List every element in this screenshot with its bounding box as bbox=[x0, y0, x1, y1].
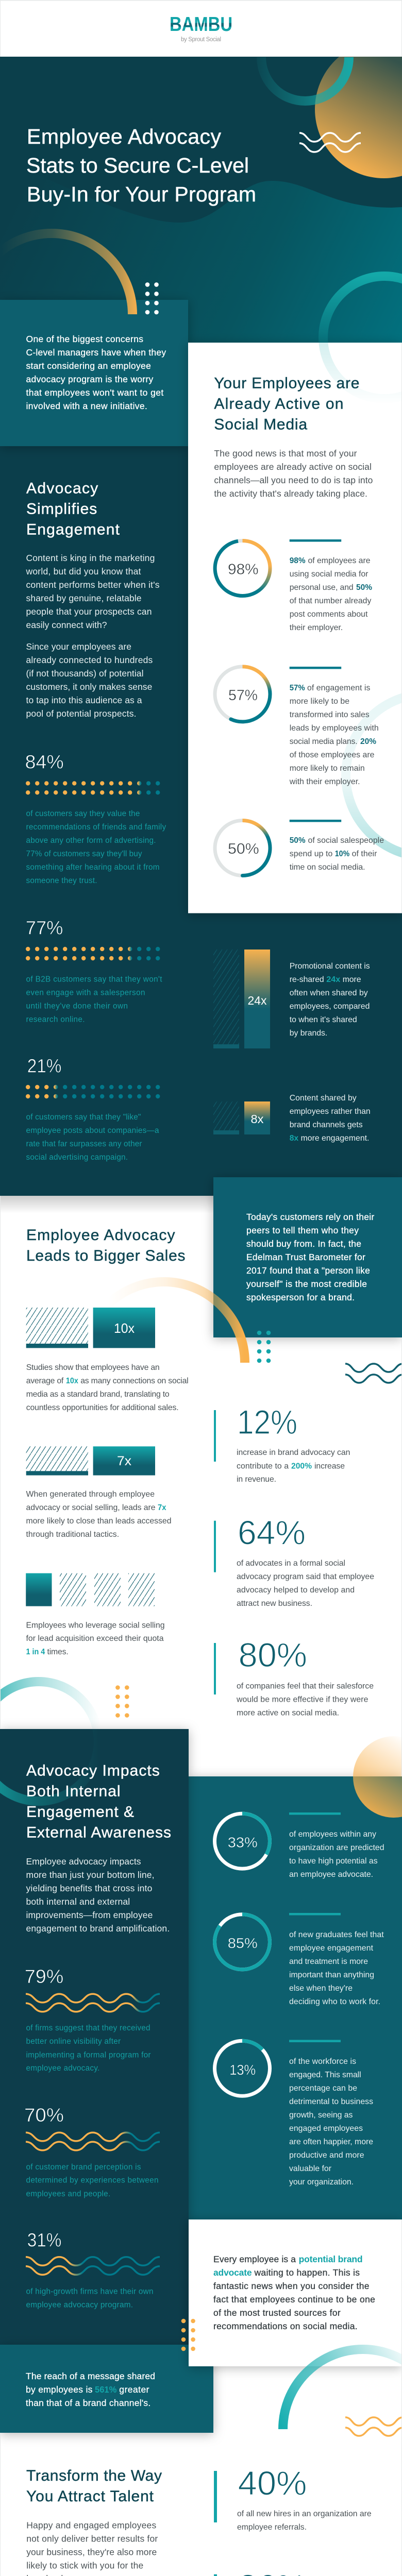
text: happy employees: not only deliver better results for bbox=[26, 2533, 158, 2544]
stat text: 57%: more likely to remain bbox=[290, 764, 365, 773]
caption 70%: of customer brand perception is bbox=[26, 2163, 141, 2172]
caption 79%: of firms suggest that they received bbox=[26, 2024, 150, 2032]
stat text: 13%: of the workforce is bbox=[289, 2057, 356, 2066]
stat text: 13%: productive and more bbox=[289, 2151, 364, 2160]
heading: advocacy simplifies engagement: Simplifies bbox=[26, 500, 97, 517]
icon: white waves bbox=[299, 133, 361, 152]
icon: gold dots bbox=[181, 2319, 195, 2351]
caption 77%: research online. bbox=[26, 1015, 85, 1024]
text 40% bbox=[237, 2510, 372, 2532]
caption 79%: employee advocacy. bbox=[26, 2064, 99, 2073]
chart: donut 57%: 57% bbox=[228, 687, 258, 704]
text: content shared by employees: more engagement. bbox=[301, 1134, 369, 1143]
text: impacts: yielding benefits that cross into bbox=[26, 1883, 152, 1893]
title: Buy-In for Your Program bbox=[27, 182, 256, 206]
text: every employee: advocate bbox=[213, 2267, 252, 2278]
heading: bigger sales: Leads to Bigger Sales bbox=[26, 1247, 186, 1264]
text: promotional content: 24x bbox=[326, 975, 340, 984]
text: promotional content: to when it's shared bbox=[290, 1015, 357, 1024]
stat text: 50%: of their bbox=[352, 850, 377, 858]
text: reach: greater bbox=[119, 2384, 149, 2395]
stat text: 13%: detrimental to business bbox=[289, 2097, 373, 2106]
chart: donut 33%: 33% bbox=[228, 1834, 258, 1850]
text 12%: increase bbox=[314, 1462, 345, 1470]
text: 1 in 4: for lead acquisition exceed their quota bbox=[26, 1634, 164, 1643]
stat: 21%: 21% bbox=[27, 1055, 61, 1076]
stat text: 13%: engaged employees bbox=[289, 2124, 363, 2133]
text: customers rely on peers bbox=[246, 1212, 374, 1302]
text: content shared by employees bbox=[290, 1094, 371, 1143]
text 40%: employee referrals. bbox=[237, 2523, 307, 2532]
text: 10x connections: average of bbox=[26, 1377, 64, 1385]
text: content is king: (if not thousands) of potential bbox=[26, 668, 143, 679]
text: 7x leads: 7x bbox=[158, 1503, 166, 1512]
stat text: 13%: are often happier, more bbox=[289, 2138, 373, 2146]
stat text: 85%: of new graduates feel that bbox=[289, 1930, 384, 1939]
caption 84%: above any other form of advertising. bbox=[26, 836, 156, 845]
text: good news: employees are already active on social bbox=[214, 462, 372, 472]
heading: Already Active on bbox=[214, 396, 343, 412]
bar chart: 24x bbox=[213, 950, 270, 1048]
stat text: 57%: 20% bbox=[360, 737, 376, 746]
stat text: 85%: important than anything bbox=[289, 1971, 374, 1979]
stat: 86% bbox=[214, 2568, 360, 2576]
stat text: 98%: their employer. bbox=[290, 623, 343, 632]
text: promotional content: employees, compared bbox=[290, 1002, 370, 1011]
text: happy employees bbox=[26, 2520, 159, 2576]
caption 77%: until they've done their own bbox=[26, 1002, 128, 1011]
text: 1 in 4 bbox=[26, 1621, 165, 1656]
panel: employees active on social media bbox=[188, 276, 402, 913]
heading: advocacy simplifies engagement bbox=[26, 480, 120, 538]
bar chart: 8x bbox=[213, 1101, 270, 1134]
stat text: 57%: of those employees are bbox=[290, 751, 375, 759]
decorative gold arch bbox=[0, 233, 132, 314]
stat text: 50%: 50% bbox=[290, 836, 306, 845]
caption 21%: rate that far surpasses any other bbox=[26, 1140, 142, 1148]
text: every employee: fantastic news when you consider the bbox=[213, 2281, 369, 2291]
text: intro: involved with a new initiative. bbox=[26, 401, 147, 411]
panel: hero bbox=[0, 40, 402, 448]
stat: 80%: 80% bbox=[239, 1636, 307, 1674]
stat: 77% bbox=[26, 917, 162, 1024]
text: 7x leads bbox=[26, 1490, 171, 1539]
chart: donut 57% bbox=[215, 667, 270, 722]
text: content is king: people that your prospects can bbox=[26, 606, 152, 617]
text: every employee: recommendations on social media. bbox=[213, 2321, 358, 2331]
icon: gold dots bbox=[115, 1685, 129, 1718]
chart: donut 85% bbox=[214, 1914, 270, 1970]
text: happy employees: Happy and engaged employees bbox=[26, 2520, 156, 2531]
caption 84%: someone they trust. bbox=[26, 876, 97, 885]
text: content is king: shared by genuine, relatable bbox=[26, 593, 141, 603]
stat text: 50% bbox=[290, 820, 384, 872]
stat: 64% bbox=[214, 1514, 374, 1608]
text: reach: than that of a brand channel's. bbox=[26, 2398, 150, 2408]
caption 84%: of customers say they value the bbox=[26, 809, 140, 818]
text: intro: start considering an employee bbox=[26, 361, 151, 371]
text: content shared by employees: employees rather than bbox=[290, 1107, 371, 1116]
text: content is king: world, but did you know that bbox=[26, 566, 141, 577]
text: every employee: potential brand bbox=[299, 2254, 363, 2264]
text: every employee: Every employee is a bbox=[213, 2254, 296, 2264]
stat: 80% bbox=[214, 1636, 374, 1718]
text: 7x leads: advocacy or social selling, leads are bbox=[26, 1503, 156, 1512]
stat text: 50%: 10% bbox=[335, 850, 349, 858]
text: impacts: both internal and external bbox=[26, 1896, 130, 1907]
text 80%: more active on social media. bbox=[237, 1708, 339, 1718]
chart: donut 50%: 50% bbox=[228, 841, 259, 857]
panel: header bbox=[0, 0, 402, 57]
text 12%: increase in brand advocacy can bbox=[237, 1448, 350, 1457]
logo: Bambu: BAMBU bbox=[170, 13, 232, 36]
text: happy employees: likely to stick with you for the bbox=[26, 2560, 143, 2570]
stat text: 57%: social media plans. bbox=[290, 737, 358, 746]
icon: teal dots bbox=[257, 1331, 271, 1363]
caption 84%: 77% of customers say they'll buy bbox=[26, 850, 142, 858]
stat text: 33%: organization are predicted bbox=[289, 1843, 384, 1852]
text: every employee: fact that employees continue to be one bbox=[213, 2294, 375, 2304]
wave chart 79% bbox=[26, 1994, 160, 2012]
caption 79% bbox=[26, 2024, 150, 2073]
dot chart 77% bbox=[28, 947, 158, 960]
stat text: 50%: spend up to bbox=[290, 850, 333, 858]
wave chart 31% bbox=[26, 2257, 160, 2275]
stat text: 98%: 98% bbox=[290, 556, 306, 565]
decorative gold arch bbox=[83, 1282, 245, 1363]
caption 84% bbox=[26, 809, 166, 885]
text: intro: advocacy program is the worry bbox=[26, 374, 154, 384]
text: content shared by employees: 8x bbox=[290, 1134, 298, 1143]
heading: bigger sales bbox=[26, 1227, 186, 1264]
panel: potential brand advocate callout bbox=[189, 2219, 402, 2366]
dot chart 21% bbox=[28, 1085, 158, 1098]
stat text: 85% bbox=[289, 1913, 384, 2006]
stat text: 85%: else when they're bbox=[289, 1984, 353, 1993]
title bbox=[26, 125, 256, 206]
chart: donut 13%: 13% bbox=[229, 2062, 256, 2078]
text: 7x leads: through traditional tactics. bbox=[26, 1530, 119, 1539]
text: reach: by employees is bbox=[26, 2384, 93, 2395]
icon: white dots bbox=[145, 282, 159, 314]
text: reach: The reach of a message shared bbox=[26, 2371, 155, 2381]
text: customers rely on peers: 2017 found that a "person like bbox=[246, 1265, 370, 1276]
stat: 70% bbox=[24, 2105, 160, 2198]
panel: trust callout bbox=[213, 1177, 402, 1337]
text: 7x leads: more likely to close than leads accessed bbox=[26, 1517, 171, 1526]
text: 10x connections: 10x bbox=[66, 1377, 78, 1385]
title: Employee Advocacy bbox=[27, 125, 222, 148]
text: intro: C-level managers have when they bbox=[26, 347, 166, 358]
stat text: 98%: personal use, and bbox=[290, 583, 354, 592]
text: impacts: engagement to brand amplification. bbox=[26, 1923, 170, 1934]
stat: 77%: 77% bbox=[26, 917, 63, 939]
stat text: 13%: engaged. This small bbox=[289, 2071, 361, 2079]
title: Stats to Secure C-Level bbox=[26, 154, 249, 177]
stat text: 57%: 57% bbox=[290, 684, 305, 692]
heading: bigger sales: Employee Advocacy bbox=[26, 1227, 175, 1244]
caption 84%: recommendations of friends and family bbox=[26, 823, 166, 832]
text: promotional content: Promotional content is bbox=[290, 962, 370, 971]
text 80%: of companies feel that their salesforce bbox=[237, 1682, 374, 1691]
text: promotional content: often when shared by bbox=[290, 989, 368, 997]
stat text: 85%: employee engagement bbox=[289, 1944, 374, 1953]
panel: right teal engagement stats bbox=[189, 1736, 402, 2219]
text: content is king: customers, it only makes sense bbox=[26, 682, 152, 692]
heading: transform: You Attract Talent bbox=[26, 2488, 154, 2505]
text: content is king: to tap into this audience as a bbox=[26, 695, 142, 705]
caption 21% bbox=[26, 1113, 159, 1162]
caption 21%: of customers say that they "like" bbox=[26, 1113, 141, 1122]
text: content is king: already connected to hundreds bbox=[26, 655, 153, 665]
panel: dark internal and external awareness bbox=[0, 1682, 189, 2345]
text: 1 in 4: Employees who leverage social selling bbox=[26, 1621, 165, 1630]
stat text: 98%: 50% bbox=[356, 583, 372, 592]
heading: transform bbox=[26, 2467, 162, 2505]
text: 10x connections: as many connections on social bbox=[80, 1377, 189, 1385]
text: impacts: Employee advocacy impacts bbox=[26, 1856, 141, 1867]
stat text: 98%: post comments about bbox=[290, 610, 368, 619]
bar chart: 8x: 8x bbox=[250, 1112, 264, 1126]
chart: donut 85%: 85% bbox=[228, 1935, 258, 1951]
text: impacts: more than just your bottom line, bbox=[26, 1870, 155, 1880]
text 40%: of all new hires in an organization are bbox=[237, 2510, 372, 2518]
caption 31% bbox=[26, 2287, 154, 2310]
stat text: 13%: valuable for bbox=[289, 2164, 331, 2173]
stat text: 57%: with their employer. bbox=[289, 777, 360, 786]
stat: 64%: 64% bbox=[238, 1514, 306, 1552]
text: promotional content: re-shared bbox=[290, 975, 324, 984]
stat text: 33% bbox=[289, 1812, 384, 1879]
text: 1 in 4: 1 in 4 bbox=[26, 1648, 45, 1656]
text: reach: 561% bbox=[95, 2384, 117, 2395]
stat: 21% bbox=[26, 1055, 159, 1162]
text 64% bbox=[237, 1559, 374, 1608]
stat text: 50%: of social salespeople bbox=[308, 836, 384, 845]
text: content is king: Since your employees are bbox=[26, 641, 131, 652]
panel: talent section background bbox=[0, 2365, 402, 2576]
text 80%: would be more effective if they were bbox=[236, 1696, 368, 1704]
text 12%: in revenue. bbox=[237, 1475, 276, 1484]
dot chart 84% bbox=[28, 781, 158, 795]
stat text: 57%: leads by employees with bbox=[290, 724, 379, 733]
stat text: 57%: more likely to be bbox=[290, 697, 349, 706]
heading: advocacy impacts: Engagement & bbox=[26, 1803, 134, 1821]
stat text: 85%: and treatment is more bbox=[289, 1957, 368, 1966]
heading: advocacy impacts: External Awareness bbox=[26, 1824, 171, 1841]
stat text: 33%: to have high potential as bbox=[289, 1857, 378, 1866]
panel: bigger sales section background bbox=[0, 1196, 402, 1778]
text: 10x connections: Studies show that employees have an bbox=[26, 1363, 160, 1372]
text: customers rely on peers: should buy from. In fact, the bbox=[246, 1239, 361, 1249]
stat text: 13%: percentage can be bbox=[289, 2084, 357, 2093]
stat: 31%: 31% bbox=[27, 2230, 61, 2251]
chart: donut 98%: 98% bbox=[228, 561, 259, 578]
text: content is king: Content is king in the marketing bbox=[26, 553, 155, 563]
text: content is king: pool of potential prospects. bbox=[26, 708, 136, 719]
stat text: 50%: time on social media. bbox=[290, 863, 365, 872]
text 80% bbox=[236, 1682, 374, 1718]
text: 10x connections bbox=[26, 1363, 189, 1412]
section shadow bbox=[0, 1196, 402, 1213]
stat text: 85%: deciding who to work for. bbox=[289, 1997, 380, 2006]
heading: Social Media bbox=[214, 416, 307, 433]
text 64%: attract new business. bbox=[237, 1599, 312, 1608]
heading: advocacy simplifies engagement: Advocacy bbox=[26, 480, 98, 497]
text: 10x connections: countless opportunities for additional sales. bbox=[26, 1403, 179, 1412]
text: every employee: of the most trusted sources for bbox=[213, 2308, 341, 2318]
icon: teal waves bbox=[345, 1364, 402, 1383]
caption 77% bbox=[26, 975, 162, 1024]
text: intro: One of the biggest concerns bbox=[26, 334, 143, 344]
text: customers rely on peers: peers to tell them who they bbox=[246, 1225, 359, 1235]
text: intro: that employees won't want to get bbox=[26, 387, 163, 398]
text: every employee bbox=[213, 2254, 375, 2331]
heading bbox=[214, 375, 359, 433]
text: customers rely on peers: Edelman Trust Barometer for bbox=[246, 1252, 365, 1262]
stat: 31% bbox=[26, 2230, 160, 2310]
chart: 7x bars bbox=[26, 1446, 155, 1476]
stat text: 98%: using social media for bbox=[290, 570, 368, 579]
caption 21%: employee posts about companies—a bbox=[26, 1126, 159, 1135]
chart: donut 50% bbox=[215, 820, 270, 876]
chart: donut 13% bbox=[214, 2041, 270, 2096]
text: intro bbox=[26, 334, 166, 411]
text: by Sprout Social: by Sprout Social bbox=[181, 37, 221, 43]
text: promotional content: more bbox=[343, 975, 361, 984]
text: customers rely on peers: yourself" is the most credible bbox=[246, 1279, 367, 1289]
text: good news: The good news is that most of your bbox=[214, 448, 357, 459]
stat text: 33%: of employees within any bbox=[289, 1830, 376, 1839]
text 64%: advocacy helped to develop and bbox=[237, 1586, 355, 1595]
text: reach bbox=[26, 2371, 155, 2408]
caption 70% bbox=[26, 2163, 159, 2198]
text 64%: advocacy program said that employee bbox=[237, 1572, 374, 1581]
panel: intro concerns bbox=[0, 300, 188, 446]
heading: advocacy impacts: Both Internal bbox=[26, 1783, 121, 1800]
stat text: 13% bbox=[289, 2040, 373, 2187]
stat: 12% bbox=[214, 1403, 350, 1484]
stat: 70%: 70% bbox=[24, 2105, 64, 2126]
stat: 40%: 40% bbox=[238, 2464, 307, 2502]
text: 10x connections: media as a standard brand, translating to bbox=[26, 1390, 170, 1399]
heading: Your Employees are bbox=[214, 375, 359, 392]
text: 7x leads: When generated through employee bbox=[26, 1490, 155, 1499]
text: content is king: content performs better when it's bbox=[26, 580, 160, 590]
panel: 561% reach callout bbox=[0, 2345, 213, 2433]
heading: transform: Transform the Way bbox=[26, 2467, 162, 2484]
bar chart: 24x: 24x bbox=[247, 994, 267, 1007]
text: good news: the activity that's already taking place. bbox=[214, 488, 367, 499]
text: promotional content bbox=[290, 962, 370, 1038]
chart: 10x bars bbox=[26, 1308, 155, 1348]
stat: 84%: 84% bbox=[25, 751, 64, 773]
stat: 79% firms: 79% bbox=[25, 1966, 63, 1987]
wave chart 70% bbox=[26, 2132, 160, 2150]
stat text: 13%: growth, seeing as bbox=[289, 2111, 353, 2120]
text: good news: channels—all you need to do is tap into bbox=[214, 475, 373, 485]
panel: dark left engagement column bbox=[0, 446, 402, 1196]
stat text: 57%: of engagement is bbox=[307, 684, 370, 692]
text 64%: of advocates in a formal social bbox=[237, 1559, 345, 1568]
text: impacts bbox=[26, 1856, 170, 1934]
chart: 10x bars: 10x bbox=[114, 1320, 135, 1336]
chart: donut 98% bbox=[215, 541, 270, 596]
caption 84%: something after hearing about it from bbox=[26, 863, 160, 872]
chart: 1 in 4 bars bbox=[26, 1573, 155, 1606]
text: good news bbox=[214, 448, 373, 499]
stat text: 98%: of employees are bbox=[308, 556, 371, 565]
chart: donut 33% bbox=[214, 1814, 270, 1869]
text: content is king: easily connect with? bbox=[26, 620, 107, 630]
heading: advocacy simplifies engagement: Engagement bbox=[26, 521, 120, 538]
caption 31%: employee advocacy program. bbox=[26, 2301, 133, 2310]
caption 77%: even engage with a salesperson bbox=[26, 989, 145, 997]
text: content shared by employees: brand channels gets bbox=[290, 1121, 363, 1129]
stat text: 13%: your organization. bbox=[289, 2178, 354, 2187]
stat text: 57%: transformed into sales bbox=[290, 710, 370, 719]
stat: 40% bbox=[214, 2464, 372, 2532]
text: customers rely on peers: Today's customers rely on their bbox=[246, 1212, 374, 1222]
text: impacts: improvements—from employee bbox=[26, 1910, 153, 1920]
stat: 84% bbox=[25, 751, 166, 885]
text 12%: contribute to a bbox=[237, 1462, 289, 1470]
caption 21%: social advertising campaign. bbox=[26, 1153, 128, 1162]
stat text: 98%: of that number already bbox=[290, 597, 371, 605]
stat: 12%: 12% bbox=[237, 1403, 297, 1441]
icon: gold waves bbox=[345, 2417, 402, 2436]
caption 31%: of high-growth firms have their own bbox=[26, 2287, 154, 2296]
text 12% bbox=[237, 1448, 350, 1484]
decorative teal arch bbox=[283, 2349, 402, 2429]
text 12%: 200% bbox=[291, 1462, 312, 1470]
caption 70%: employees and people. bbox=[26, 2190, 110, 2198]
caption 77%: of B2B customers say that they won't bbox=[26, 975, 162, 984]
stat text: 57% bbox=[289, 667, 379, 786]
caption 79%: implementing a formal program for bbox=[26, 2050, 150, 2060]
chart: 7x bars: 7x bbox=[117, 1454, 132, 1468]
stat text: 98% bbox=[290, 539, 372, 632]
heading: advocacy impacts: Advocacy Impacts bbox=[26, 1762, 160, 1780]
text: promotional content: by brands. bbox=[290, 1029, 327, 1038]
heading: advocacy impacts bbox=[26, 1762, 171, 1841]
text: content shared by employees: Content shared by bbox=[290, 1094, 357, 1103]
text: content is king bbox=[26, 553, 160, 719]
text: customers rely on peers: spokesperson for a brand. bbox=[246, 1292, 355, 1302]
stat text: 33%: an employee advocate. bbox=[289, 1870, 373, 1879]
stat: 79% firms bbox=[25, 1966, 160, 2073]
text: every employee: waiting to happen. This is bbox=[254, 2267, 360, 2278]
text: happy employees: your business, they're also more bbox=[26, 2547, 157, 2557]
caption 79%: better online visibility after bbox=[26, 2037, 121, 2046]
caption 70%: determined by experiences between bbox=[26, 2176, 159, 2185]
text: 1 in 4: times. bbox=[47, 1648, 69, 1656]
